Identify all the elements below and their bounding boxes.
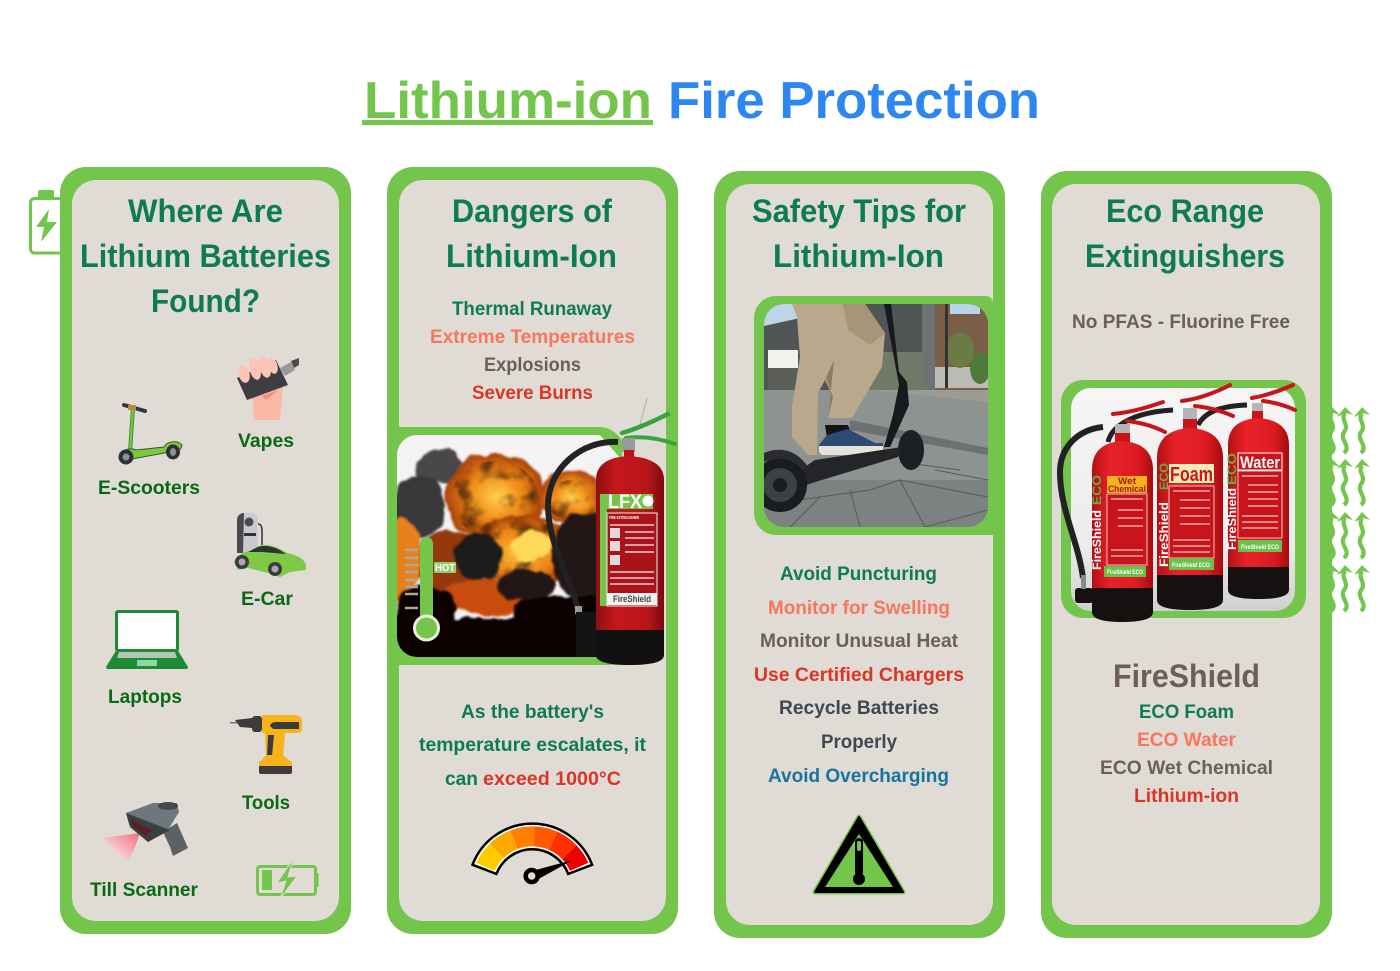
foam extinguisher: Foam: [1170, 464, 1213, 486]
label: e-scooters: E-Scooters: [98, 477, 200, 499]
list: eco range: ECO Foam: [1139, 701, 1234, 723]
text: temperature warning: can: [445, 768, 478, 790]
text: temperature warning: exceed 1000°C: [483, 768, 621, 790]
heading: eco range extinguishers: [1085, 193, 1285, 274]
title: [362, 72, 1040, 130]
heading: fireshield: FireShield: [1113, 658, 1260, 694]
heading: eco range extinguishers: Extinguishers: [1085, 238, 1285, 274]
title: Lithium-ion: [364, 72, 652, 130]
icon: temperature gauge: [472, 824, 592, 882]
icon: charging battery: [258, 859, 318, 899]
list: eco range: [1100, 701, 1273, 807]
list: safety tips: Properly: [821, 731, 897, 753]
list: safety tips: [754, 563, 964, 787]
icon: barcode till scanner: [102, 802, 188, 862]
wet chemical extinguisher: Chemical: [1108, 484, 1146, 495]
icon: e-scooter: [118, 405, 182, 464]
label: e-car: E-Car: [241, 588, 293, 610]
water extinguisher: FireShield: [1225, 488, 1239, 550]
foam extinguisher: FireShield ECO: [1172, 562, 1210, 569]
water extinguisher: FireShield ECO: [1241, 544, 1279, 551]
label: till scanner: Till Scanner: [90, 879, 198, 901]
heading: dangers of lithium-ion: [446, 193, 617, 274]
title: Fire Protection: [668, 72, 1040, 130]
wet chemical extinguisher: ECO: [1090, 475, 1104, 505]
heading: where are lithium batteries found: Where Are: [128, 193, 283, 229]
heading: where are lithium batteries found: Found?: [151, 283, 260, 319]
icon: battery with lightning bolt: [30, 190, 66, 253]
list: dangers: Extreme Temperatures: [430, 326, 635, 348]
list: safety tips: Monitor for Swelling: [768, 597, 950, 619]
icon: wavy heat arrows: [1324, 407, 1370, 611]
icon: LFX extinguisher: FireShield: [613, 594, 651, 604]
water extinguisher: Water: [1240, 453, 1280, 472]
icon: LFX extinguisher: FIRE EXTINGUISHER: [609, 515, 639, 520]
list: safety tips: Use Certified Chargers: [754, 664, 964, 686]
text: no PFAS: No PFAS - Fluorine Free: [1072, 311, 1290, 333]
list: dangers: Severe Burns: [472, 382, 593, 404]
list: dangers: [430, 298, 635, 404]
foam extinguisher: [1157, 385, 1233, 610]
heading: where are lithium batteries found: [80, 193, 331, 319]
list: dangers: Explosions: [484, 354, 581, 376]
list: dangers: Thermal Runaway: [452, 298, 612, 320]
panel: safety tips for lithium-ion: [714, 171, 1005, 938]
icon: LFX extinguisher: LFX: [608, 492, 642, 513]
foam extinguisher: FireShield: [1157, 502, 1171, 567]
photo: rider on electric scooter: [753, 296, 993, 535]
wet chemical extinguisher: FireShield: [1090, 510, 1104, 570]
list: safety tips: Avoid Puncturing: [780, 563, 937, 585]
panel: dangers of lithium-ion: [378, 167, 678, 934]
foam extinguisher: ECO: [1157, 463, 1171, 490]
wet chemical extinguisher: Wet: [1118, 476, 1137, 487]
heading: safety tips: [752, 193, 966, 274]
photo: three eco extinguishers: [1060, 380, 1306, 622]
icon: vape in hand: [236, 355, 299, 420]
icon: hot thermometer: [405, 537, 456, 640]
list: safety tips: Recycle Batteries: [779, 697, 939, 719]
icon: electric car at charger: [234, 513, 306, 577]
wet chemical extinguisher: [1060, 402, 1165, 622]
list: eco range: ECO Wet Chemical: [1100, 757, 1273, 779]
wet chemical extinguisher: FireShield ECO: [1107, 569, 1143, 576]
list: safety tips: Monitor Unusual Heat: [760, 630, 958, 652]
water extinguisher: [1225, 385, 1295, 599]
water extinguisher: ECO: [1225, 453, 1239, 485]
heading: safety tips: Lithium-Ion: [773, 238, 944, 274]
icon: hot thermometer: HOT: [435, 563, 455, 574]
photo: explosion with thermometer and LFX extinguisher: [378, 398, 675, 665]
list: eco range: ECO Water: [1137, 729, 1236, 751]
icon: cordless drill: [230, 715, 302, 774]
list: eco range: Lithium-ion: [1134, 785, 1239, 807]
label: tools: Tools: [242, 792, 290, 814]
icon: heat warning triangle: [815, 817, 903, 892]
panel: eco range extinguishers: [1041, 171, 1332, 938]
heading: dangers of lithium-ion: Dangers of: [452, 193, 612, 229]
panel: where are lithium batteries found: [60, 167, 351, 934]
icon: LFX extinguisher: [548, 398, 675, 665]
text: temperature warning: [419, 701, 646, 790]
label: laptops: Laptops: [108, 686, 182, 708]
heading: eco range extinguishers: Eco Range: [1106, 193, 1264, 229]
text: temperature warning: temperature escalates, it: [419, 734, 646, 756]
heading: dangers of lithium-ion: Lithium-Ion: [446, 238, 617, 274]
label: vapes: Vapes: [238, 430, 294, 452]
icon: laptop: [106, 612, 188, 669]
heading: safety tips: Safety Tips for: [752, 193, 966, 229]
list: safety tips: Avoid Overcharging: [768, 765, 949, 787]
text: temperature warning: As the battery's: [461, 701, 604, 723]
heading: where are lithium batteries found: Lithium Batteries: [80, 238, 331, 274]
